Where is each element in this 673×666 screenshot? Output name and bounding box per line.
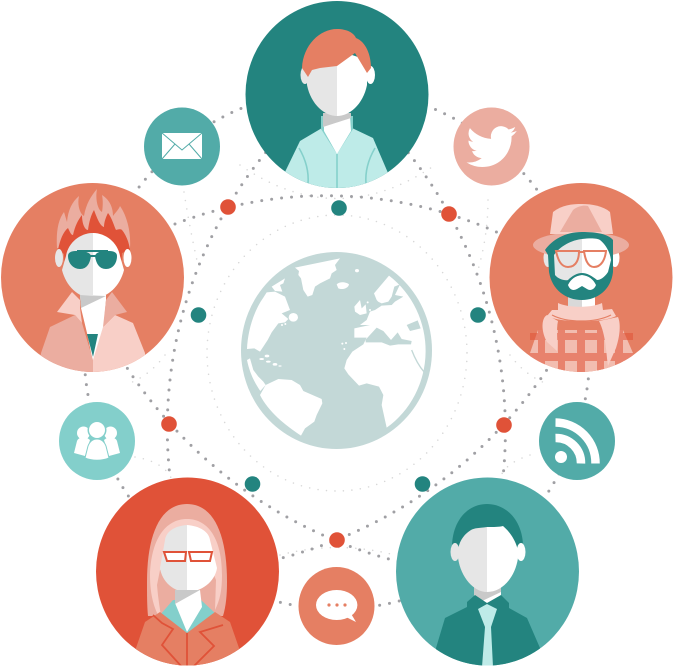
flame hair xyxy=(57,189,130,248)
hat brim xyxy=(533,232,629,258)
hair xyxy=(302,29,371,77)
face xyxy=(160,525,217,592)
neck and chest xyxy=(175,590,202,632)
suit xyxy=(436,595,540,666)
icon: RSS feed xyxy=(539,402,615,480)
jacket xyxy=(136,612,239,666)
jacket xyxy=(38,315,93,375)
connection nodes xyxy=(161,199,512,548)
icon: twitter bird xyxy=(454,108,530,186)
hair and beard xyxy=(545,232,613,300)
icon: email xyxy=(144,108,220,186)
plaid shirt xyxy=(530,330,633,375)
face xyxy=(300,50,375,116)
icon: group of people xyxy=(59,402,135,480)
teal shirt xyxy=(87,334,98,357)
red hair xyxy=(58,210,130,270)
red glasses xyxy=(164,552,212,561)
ears xyxy=(544,249,620,267)
neck xyxy=(582,297,595,307)
tie xyxy=(478,604,497,666)
person: left, man with flame hair and sunglasses xyxy=(1,183,184,375)
sunglasses xyxy=(68,250,117,269)
neck and chest xyxy=(80,295,106,362)
hat crown xyxy=(550,204,613,234)
long hair xyxy=(147,504,227,622)
icon: chat bubble xyxy=(298,567,374,645)
glasses xyxy=(556,251,606,267)
person: bottom left, woman with long hair and glasses xyxy=(96,478,279,666)
teal collar xyxy=(160,600,215,634)
dotted connection lines xyxy=(84,89,590,609)
neck xyxy=(483,592,501,603)
face xyxy=(450,526,526,592)
hair xyxy=(452,504,523,552)
scarf xyxy=(542,303,620,366)
person: right, bearded man with hat and scarf xyxy=(490,183,672,375)
face xyxy=(55,233,132,298)
person: top, red-haired man in pale shirt xyxy=(246,1,428,195)
shirt xyxy=(285,128,388,188)
person: bottom right, man in suit and tie xyxy=(396,478,579,666)
globe xyxy=(241,252,432,449)
face xyxy=(554,238,611,290)
